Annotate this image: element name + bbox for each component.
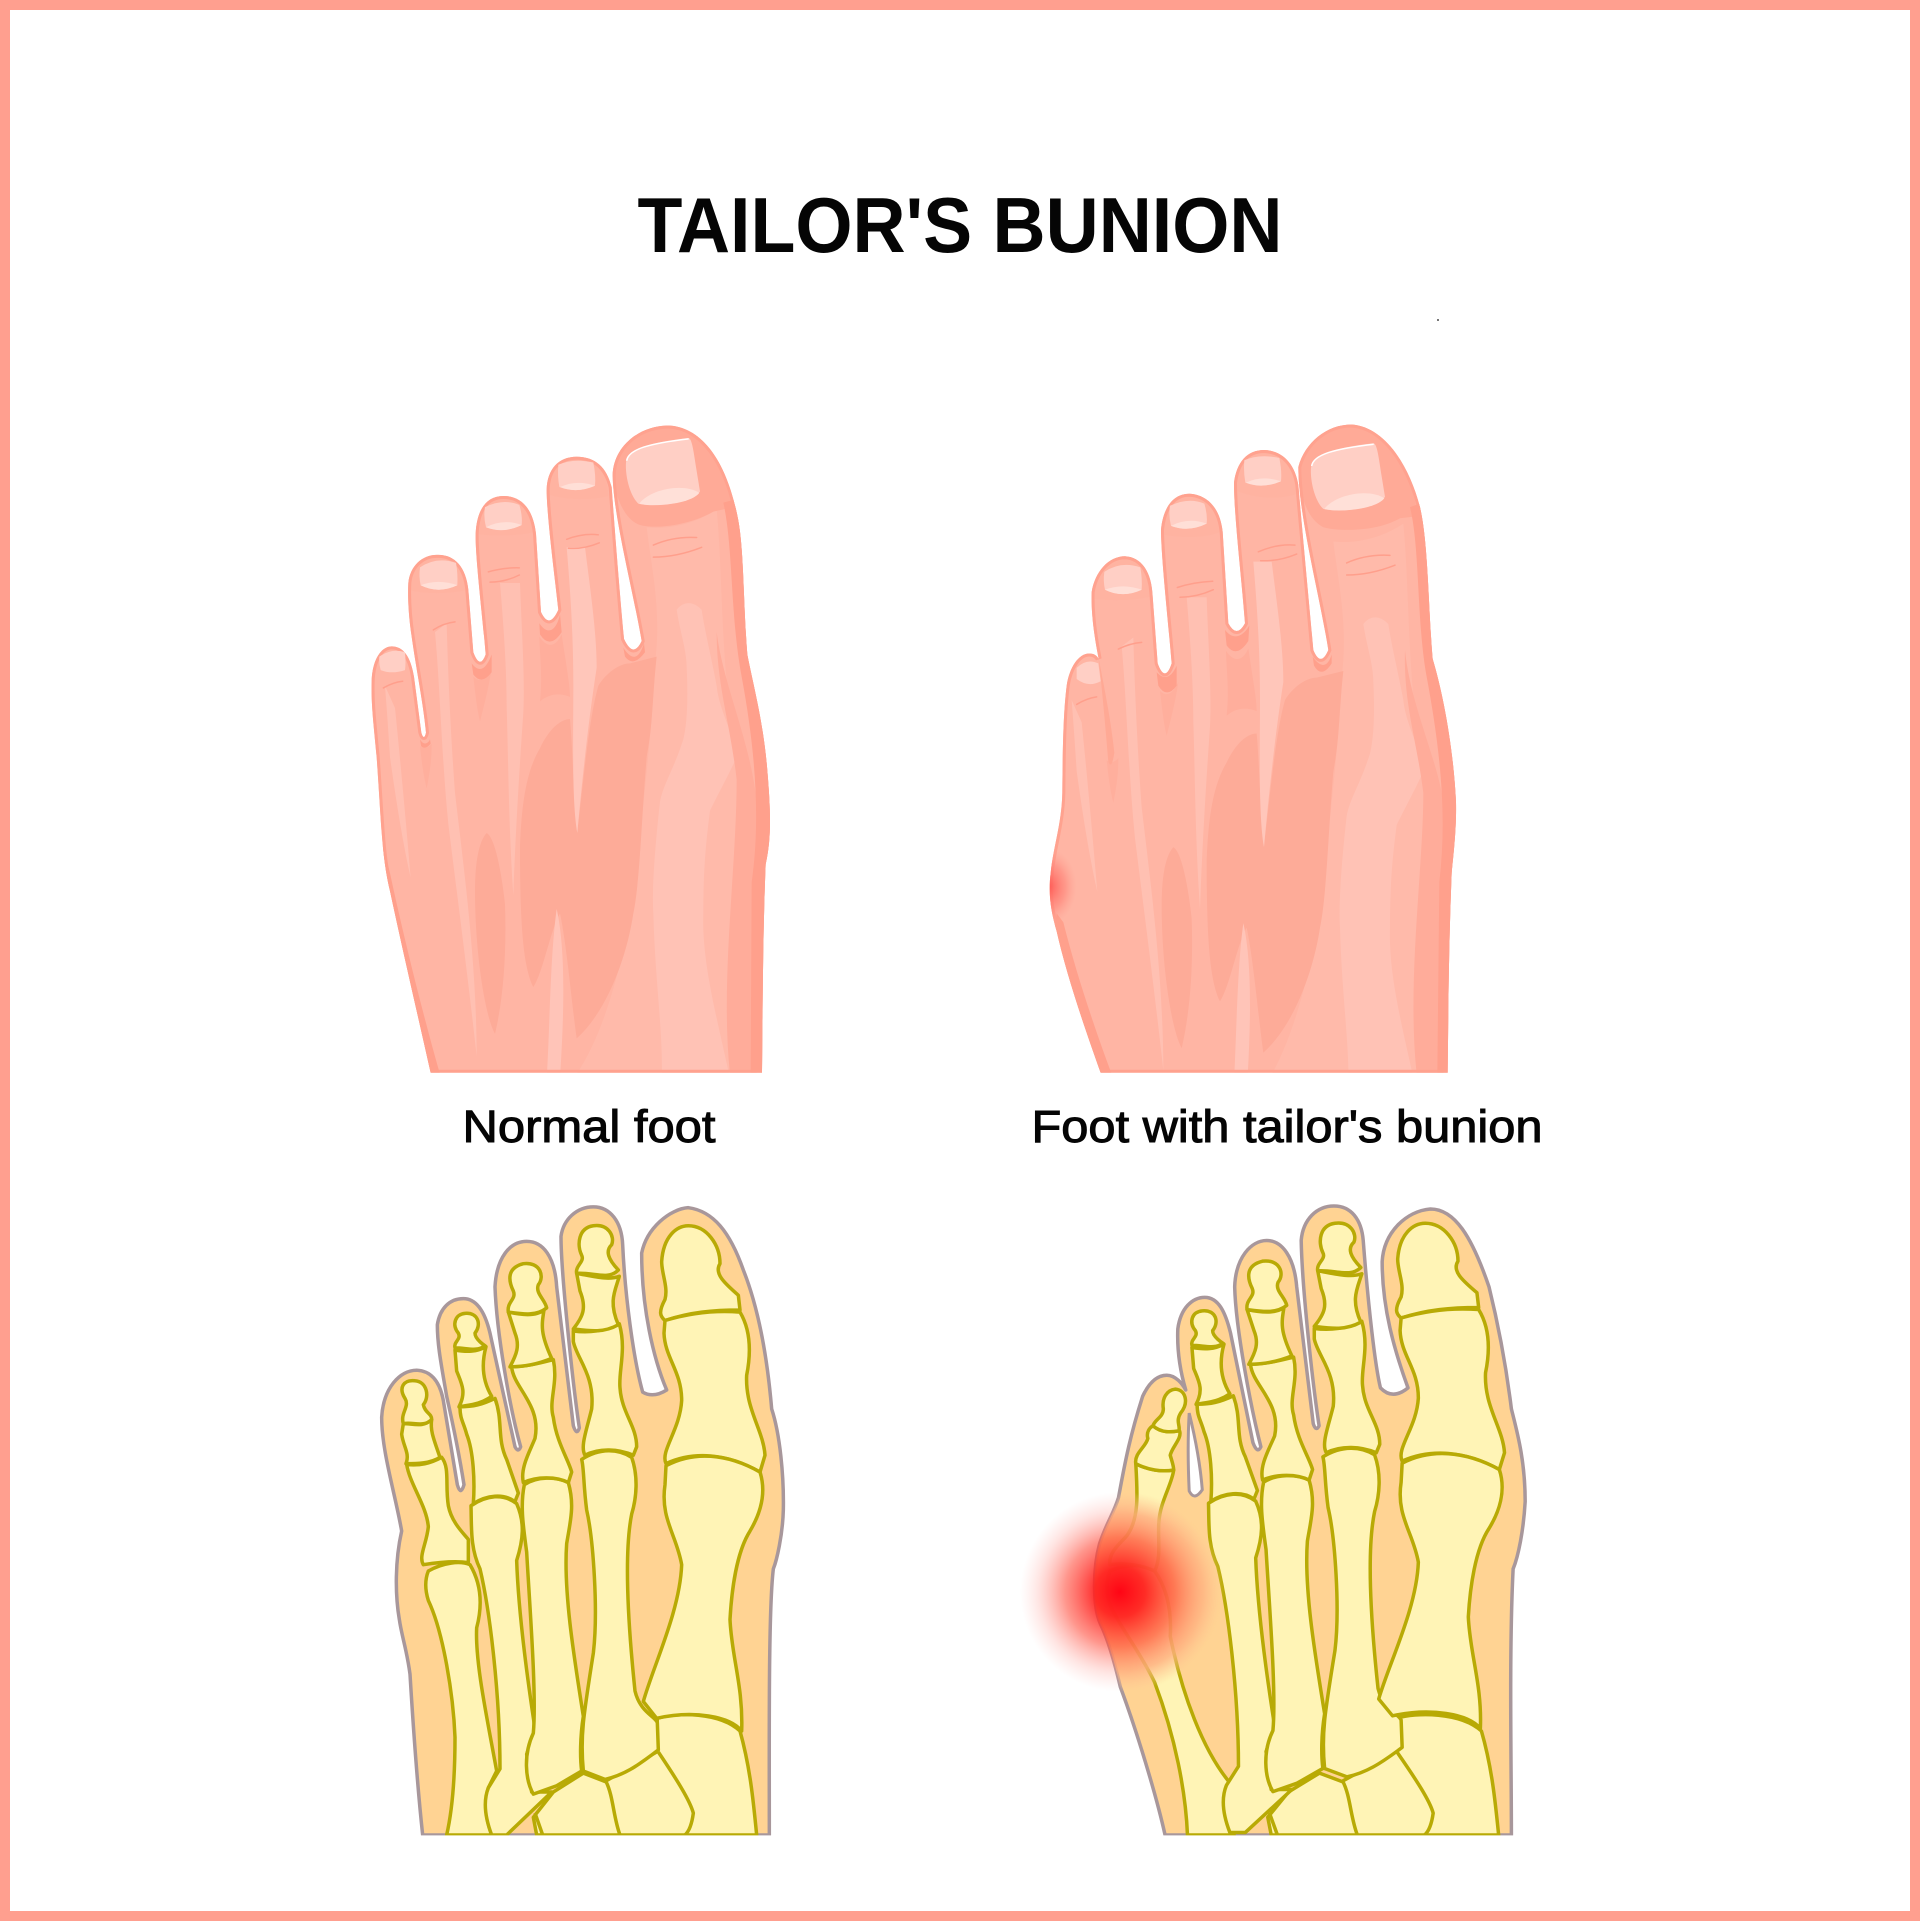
illustration: foot with tailor's bunion skin [1030,425,1460,1093]
skin creases: bunion foot [1077,545,1395,704]
illustration: bunion foot skeleton [1095,1206,1527,1844]
stray dot [1437,319,1439,321]
bunion inflammation glow [1026,1494,1224,1690]
label: foot with tailor's bunion: Foot with tailor's bunion [1032,1101,1542,1152]
title: TAILOR'S BUNION [638,181,1282,269]
skin creases: normal foot [383,534,702,688]
illustration: normal foot skin [372,425,773,1079]
toenails: bunion foot [1077,443,1385,684]
gap between fifth and fourth toes [1188,1413,1202,1496]
label: normal foot: Normal foot [462,1101,716,1152]
crop edge [410,1835,777,1844]
bunion redness: skin [1050,857,1072,916]
bones: displaced fifth ray [1107,1389,1234,1835]
illustration: normal foot skeleton [382,1207,783,1844]
crop edge [1148,1835,1527,1844]
toenails: normal foot [379,438,700,672]
bones: fifth ray, normal foot [402,1381,497,1835]
